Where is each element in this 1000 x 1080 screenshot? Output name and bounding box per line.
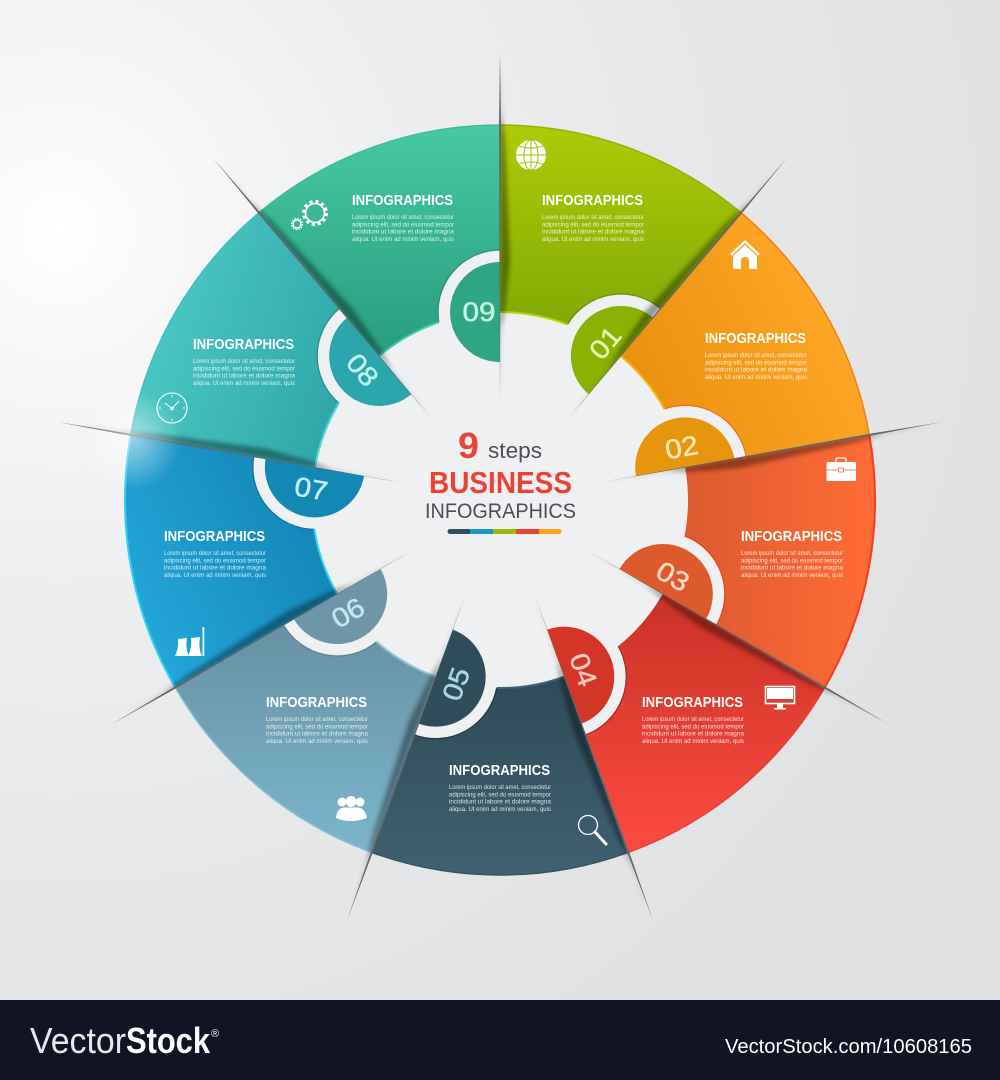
panel: step 04: INFOGRAPHICS: [642, 694, 743, 711]
icon: magnifier: [578, 816, 606, 844]
panel: step 07: Lorem ipsum dolor sit amet, consectetur: [164, 550, 267, 557]
title: BUSINESS: [429, 465, 572, 500]
panel: step 07: adipiscing elit, sed do eiusmod tempor: [164, 557, 267, 564]
title: steps: [488, 438, 542, 463]
footer image id: VectorStock.com/10608165: [725, 1036, 972, 1058]
panel: step 08: aliqua. Ut enim ad minim veniam, quis: [193, 380, 295, 387]
panel: step 07: [89, 435, 364, 713]
panel: step 01: Lorem ipsum dolor sit amet, consectetur: [542, 214, 645, 221]
panel: step 02: [594, 198, 869, 476]
panel: step 04: incididunt ut labore et dolore magna: [642, 731, 744, 738]
panel: step 06: adipiscing elit, sed do eiusmod tempor: [266, 723, 369, 730]
panel: step 05: 05: [437, 664, 476, 705]
panel: step 05: INFOGRAPHICS: [449, 762, 550, 779]
panel: step 07: incididunt ut labore et dolore magna: [164, 565, 266, 572]
panel: step 01: INFOGRAPHICS: [542, 192, 643, 209]
panel: step 01: incididunt ut labore et dolore magna: [542, 229, 644, 236]
footer logo: Vector: [30, 1020, 126, 1061]
panel: step 02: Lorem ipsum dolor sit amet, consectetur: [705, 352, 808, 359]
panel: step 09: Lorem ipsum dolor sit amet, consectetur: [352, 214, 455, 221]
panel: step 05: adipiscing elit, sed do eiusmod tempor: [449, 791, 552, 798]
panel: step 05: incididunt ut labore et dolore magna: [449, 799, 551, 806]
title: [425, 425, 576, 523]
panel: step 01: 01: [583, 321, 628, 365]
panel: step 07: INFOGRAPHICS: [164, 528, 265, 545]
panel: step 02: 02: [663, 430, 701, 465]
icon: people: [336, 796, 367, 821]
panel: step 08: adipiscing elit, sed do eiusmod tempor: [193, 365, 296, 372]
panel: step 02: adipiscing elit, sed do eiusmod tempor: [705, 359, 808, 366]
panel: step 03: Lorem ipsum dolor sit amet, consectetur: [741, 550, 844, 557]
title: INFOGRAPHICS: [425, 500, 576, 523]
panel: step 04: aliqua. Ut enim ad minim veniam, quis: [642, 738, 744, 745]
panel: step 08: incididunt ut labore et dolore magna: [193, 373, 295, 380]
panel: step 05: Lorem ipsum dolor sit amet, consectetur: [449, 784, 552, 791]
icon: globe: [516, 140, 546, 170]
panel: step 08: 08: [340, 348, 384, 392]
icon: gears: [292, 202, 326, 230]
panel: step 02: INFOGRAPHICS: [705, 330, 806, 347]
panel: step 07: aliqua. Ut enim ad minim veniam, quis: [164, 572, 266, 579]
icon: cooling towers: [175, 627, 204, 656]
panel: step 06: 06: [326, 592, 370, 634]
panel: step 08: INFOGRAPHICS: [193, 336, 294, 353]
panel: step 09: INFOGRAPHICS: [352, 192, 453, 209]
icon: clock: [157, 393, 187, 423]
panel: step 05: [372, 630, 679, 935]
icon: house: [730, 240, 760, 269]
footer logo: [30, 1020, 219, 1061]
panel: step 06: INFOGRAPHICS: [266, 694, 367, 711]
footer bar: [0, 1000, 1000, 1080]
panel: step 04: adipiscing elit, sed do eiusmod tempor: [642, 723, 745, 730]
panel: step 04: Lorem ipsum dolor sit amet, consectetur: [642, 716, 745, 723]
title: 9: [458, 425, 479, 466]
panel: step 03: adipiscing elit, sed do eiusmod tempor: [741, 557, 844, 564]
glow highlight: [82, 390, 182, 490]
icon: monitor: [766, 686, 794, 710]
panel: step 09: adipiscing elit, sed do eiusmod tempor: [352, 221, 455, 228]
panel: step 06: [175, 569, 501, 896]
panel: step 07: 07: [292, 471, 330, 507]
panel: step 02: incididunt ut labore et dolore magna: [705, 367, 807, 374]
panel: step 05: aliqua. Ut enim ad minim veniam, quis: [449, 806, 551, 813]
panel: step 01: aliqua. Ut enim ad minim veniam, quis: [542, 236, 644, 243]
footer logo: ®: [211, 1028, 219, 1040]
panel: step 03: INFOGRAPHICS: [741, 528, 842, 545]
panel: step 08: Lorem ipsum dolor sit amet, consectetur: [193, 358, 296, 365]
panel: step 03: aliqua. Ut enim ad minim veniam, quis: [741, 572, 843, 579]
panel: step 02: aliqua. Ut enim ad minim veniam, quis: [705, 374, 807, 381]
radial slits with shadows: [59, 52, 943, 924]
panel: step 03: [620, 360, 945, 688]
panel: step 09: incididunt ut labore et dolore magna: [352, 229, 454, 236]
panel: step 01: adipiscing elit, sed do eiusmod tempor: [542, 221, 645, 228]
panel: step 09: [259, 125, 500, 362]
panel: step 06: Lorem ipsum dolor sit amet, consectetur: [266, 716, 369, 723]
panel: step 03: incididunt ut labore et dolore magna: [741, 565, 843, 572]
colour bar: [448, 529, 562, 534]
panel: step 08: [74, 213, 411, 549]
panel: step 06: incididunt ut labore et dolore magna: [266, 731, 368, 738]
panel: step 01: [404, 58, 741, 394]
panel: step 09: 09: [462, 297, 496, 327]
panel: step 03: 03: [651, 555, 695, 598]
panel: step 04: [547, 547, 855, 852]
panel: step 09: aliqua. Ut enim ad minim veniam, quis: [352, 236, 454, 243]
footer logo: Stock: [126, 1020, 211, 1061]
panel: step 06: aliqua. Ut enim ad minim veniam, quis: [266, 738, 368, 745]
panel: step 04: 04: [563, 649, 603, 690]
icon: briefcase: [826, 458, 856, 481]
centre disc: [245, 245, 755, 755]
